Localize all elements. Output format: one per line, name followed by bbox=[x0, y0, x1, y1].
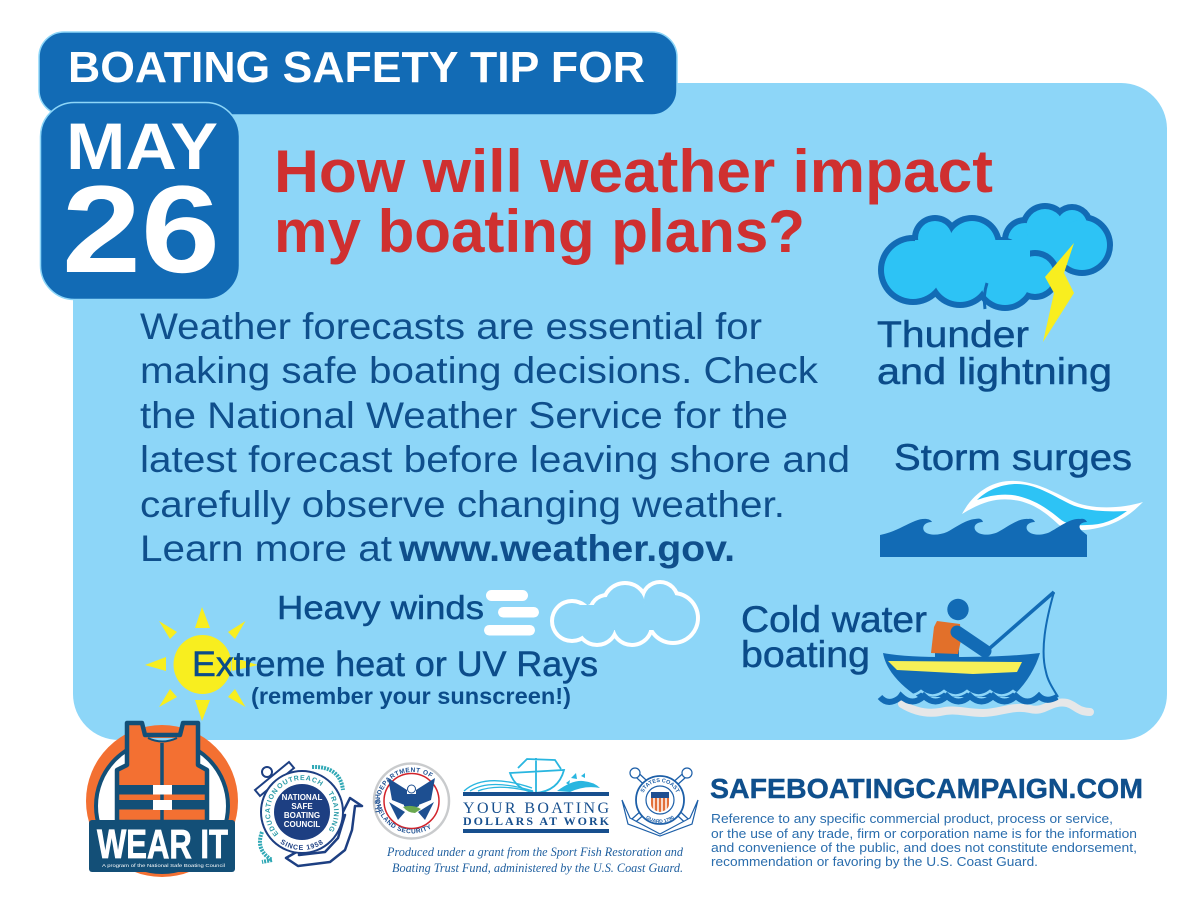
date badge: May 26 bbox=[40, 102, 240, 300]
label: cold water boating: Cold water bbox=[741, 599, 927, 640]
logo: National Safe Boating Council: BOATING bbox=[284, 811, 320, 820]
icon: storm surge waves bbox=[880, 481, 1143, 557]
text block: disclaimer: or the use of any trade, firm or corporation name is for the information bbox=[711, 826, 1137, 841]
label: storm surges: Storm surges bbox=[894, 437, 1132, 478]
text block: weather forecast advice: carefully observe changing weather. bbox=[140, 484, 785, 525]
text block: disclaimer: and convenience of the public, and does not constitute endorsement, bbox=[711, 840, 1137, 855]
text block: weather forecast advice: the National Weather Service for the bbox=[140, 395, 788, 436]
icon: sun bbox=[145, 607, 258, 721]
label: heavy winds: Heavy winds bbox=[277, 589, 484, 626]
text block: weather forecast advice bbox=[140, 306, 850, 569]
heading: weather question: How will weather impact bbox=[274, 138, 993, 205]
label: extreme heat or UV rays: (remember your sunscreen!) bbox=[251, 683, 571, 709]
label: cold water boating: boating bbox=[741, 634, 870, 675]
text block: disclaimer: recommendation or favoring by the U.S. Coast Guard. bbox=[711, 854, 1038, 869]
text block: disclaimer bbox=[711, 811, 1137, 869]
label: cold water boating bbox=[741, 599, 927, 675]
text block: grant credit: Produced under a grant from the Sport Fish Restoration and bbox=[386, 845, 684, 859]
label: thunder and lightning: Thunder bbox=[877, 314, 1029, 355]
text block: weather forecast advice: Weather forecasts are essential for bbox=[140, 306, 762, 347]
text block: grant credit: Boating Trust Fund, administered by the U.S. Coast Guard. bbox=[392, 861, 683, 875]
logo: Wear It life jacket: A program of the National Safe Boating Council bbox=[102, 863, 225, 868]
logo: U.S. Coast Guard seal: GUARD 1790 bbox=[646, 816, 674, 823]
logo: Wear It life jacket bbox=[86, 723, 238, 877]
label: thunder and lightning bbox=[877, 314, 1112, 392]
logo: Your Boating Dollars at Work: YOUR BOATING bbox=[463, 800, 609, 817]
icon: storm clouds with lightning bbox=[878, 203, 1113, 342]
logo: Department of Homeland Security seal: U.S. DEPARTMENT OF bbox=[374, 767, 434, 812]
date badge: May 26: MAY bbox=[66, 109, 218, 183]
banner: boating safety tip for: BOATING SAFETY TIP FOR bbox=[68, 43, 645, 92]
logo: Department of Homeland Security seal bbox=[372, 762, 450, 840]
text block: weather forecast advice: Learn more at bbox=[140, 528, 393, 569]
logo: U.S. Coast Guard seal: STATES COAST bbox=[640, 778, 680, 792]
text block: weather forecast advice: latest forecast before leaving shore and bbox=[140, 439, 850, 480]
heading: weather question: my boating plans? bbox=[274, 198, 805, 265]
logo: National Safe Boating Council: SAFE bbox=[291, 802, 313, 811]
logo: National Safe Boating Council: OUTREACH bbox=[277, 775, 324, 788]
heading: campaign website: SAFEBOATINGCAMPAIGN.COM bbox=[710, 773, 1143, 804]
logo: Wear It life jacket: WEAR IT bbox=[97, 821, 228, 867]
logo: National Safe Boating Council bbox=[254, 760, 364, 868]
logo: Your Boating Dollars at Work: DOLLARS AT WORK bbox=[463, 814, 610, 828]
label: extreme heat or UV rays bbox=[192, 645, 598, 709]
banner: boating safety tip for bbox=[39, 32, 677, 115]
icon: white cloud bbox=[550, 580, 700, 647]
label: thunder and lightning: and lightning bbox=[877, 351, 1112, 392]
logo: Department of Homeland Security seal: HOMELAND SECURITY bbox=[375, 794, 430, 834]
heading: weather question bbox=[274, 138, 993, 265]
logo: U.S. Coast Guard seal bbox=[621, 767, 699, 837]
logo: National Safe Boating Council: NATIONAL bbox=[282, 793, 322, 802]
logo: National Safe Boating Council: COUNCIL bbox=[284, 820, 320, 829]
icon: fisherman in boat bbox=[880, 592, 1090, 713]
text block: grant credit bbox=[386, 845, 684, 875]
logo: Your Boating Dollars at Work bbox=[463, 758, 610, 833]
panel: main light blue background bbox=[73, 83, 1167, 740]
logo: National Safe Boating Council: EDUCATION bbox=[265, 788, 278, 837]
logo: National Safe Boating Council: TRAINING bbox=[328, 790, 339, 832]
icon: wind bars bbox=[484, 590, 539, 636]
date badge: May 26: 26 bbox=[62, 161, 220, 299]
logo: National Safe Boating Council: SINCE 1958 bbox=[280, 840, 323, 850]
text block: weather forecast advice: making safe boating decisions. Check bbox=[140, 350, 819, 391]
text block: weather forecast advice: www.weather.gov. bbox=[398, 528, 735, 569]
text block: disclaimer: Reference to any specific commercial product, process or service, bbox=[711, 811, 1113, 826]
label: extreme heat or UV rays: Extreme heat or UV Rays bbox=[192, 645, 598, 684]
